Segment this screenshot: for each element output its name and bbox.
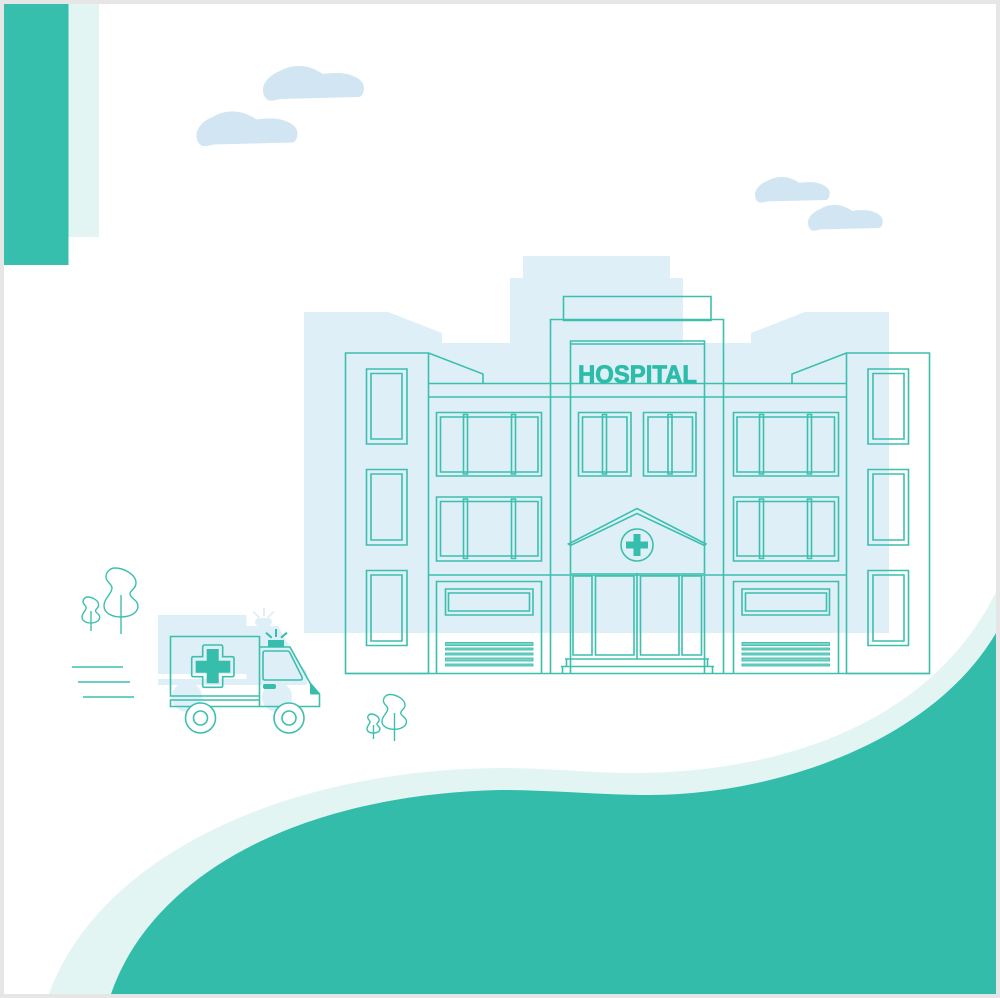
cloud 3 (755, 177, 830, 203)
central windows (578, 412, 696, 476)
hospital building (346, 296, 930, 674)
tree: large upper (104, 568, 138, 634)
ambulance window (263, 651, 302, 680)
background wave: light (49, 592, 996, 994)
corner accent: green bar (4, 4, 68, 265)
hospital name: HOSPITAL (578, 361, 697, 389)
icon: medical cross badge (621, 529, 653, 561)
entrance steps (561, 659, 714, 673)
tree: small upper (82, 597, 100, 631)
rooftop sign board (564, 296, 711, 320)
cloud 2 (196, 112, 298, 146)
ambulance silhouette (158, 608, 307, 712)
ambulance door handle (263, 684, 276, 689)
ambulance (170, 629, 320, 733)
corner accent: light bar (68, 4, 99, 237)
tree: large lower (382, 694, 406, 741)
ambulance body (170, 636, 320, 706)
icon: ambulance cross (192, 645, 234, 687)
ambulance siren (266, 629, 287, 647)
right wing (734, 353, 930, 674)
hospital skyline silhouette (304, 256, 889, 633)
tree: small lower (367, 714, 380, 739)
entrance doors (570, 573, 704, 659)
cloud 4 (808, 205, 883, 231)
speed lines (72, 667, 134, 697)
entrance pediment (568, 508, 706, 546)
background wave: green (111, 633, 996, 994)
horizontal bands (346, 384, 930, 674)
ambulance headlight (310, 682, 320, 694)
left wing (346, 353, 542, 674)
ambulance wheels (186, 703, 304, 733)
central tower (550, 320, 724, 674)
cloud 1 (263, 66, 364, 101)
